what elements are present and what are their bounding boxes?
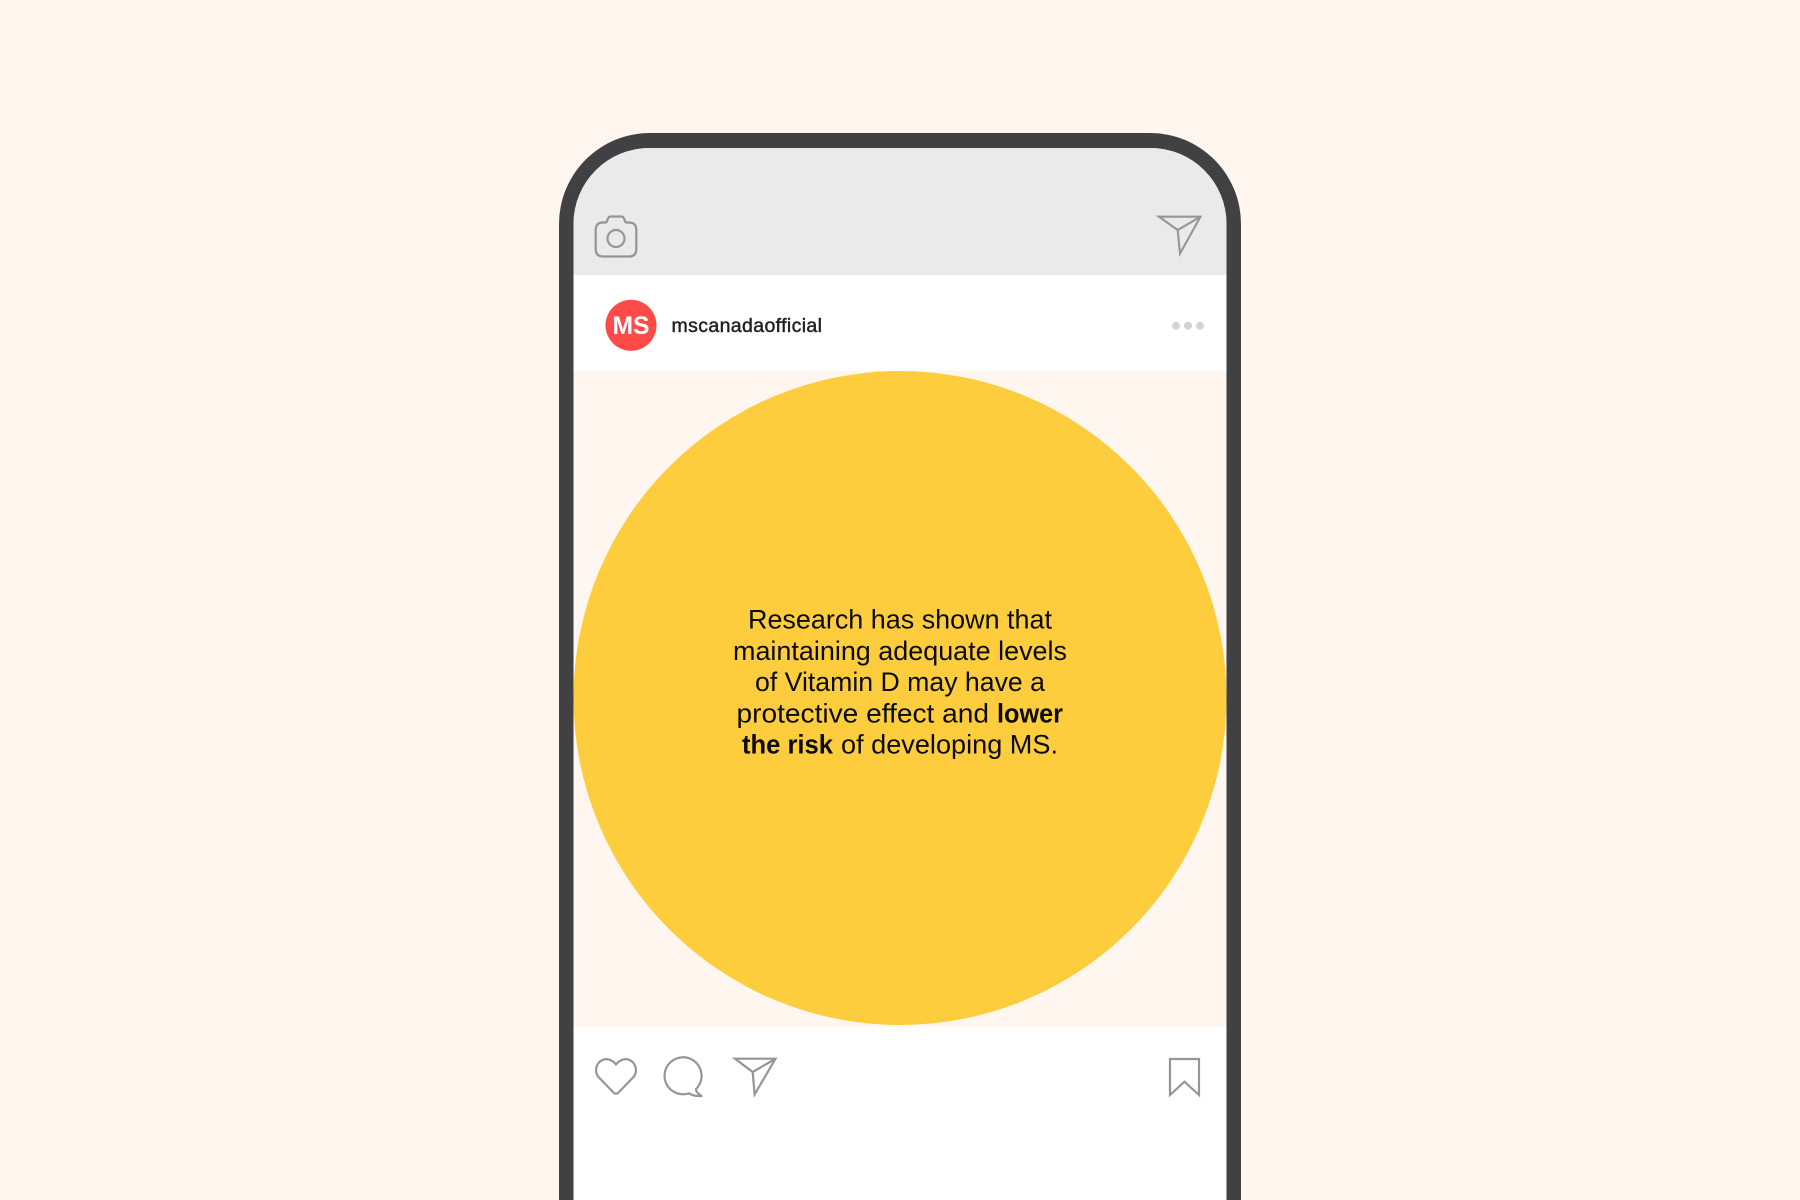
phone screen — [574, 148, 1226, 1200]
message text: the risk — [742, 730, 834, 760]
post header — [606, 300, 1204, 351]
icon: share — [735, 1059, 776, 1094]
icon: more dots — [1172, 322, 1204, 330]
yellow circle — [574, 371, 1226, 1025]
message text: lower — [997, 698, 1063, 728]
phone body frame — [559, 133, 1241, 1200]
icon: heart — [596, 1059, 636, 1094]
message text: protective effect and — [736, 698, 989, 728]
top app bar — [574, 148, 1226, 275]
message text: of Vitamin D may have a — [755, 667, 1046, 697]
message text: Research has shown that — [748, 604, 1052, 634]
icon: send — [1159, 217, 1200, 254]
account name: mscanadaofficial — [672, 315, 822, 337]
icon: comment bubble — [665, 1057, 702, 1096]
avatar: MS logo — [606, 300, 656, 351]
icon: camera — [596, 216, 636, 256]
message text: maintaining adequate levels — [733, 636, 1067, 666]
post action bar — [596, 1057, 1199, 1096]
message text — [733, 604, 1067, 760]
post image panel — [574, 371, 1226, 1027]
icon: bookmark — [1170, 1059, 1199, 1095]
message text: of developing MS. — [841, 730, 1058, 760]
avatar: MS logo: MS — [612, 312, 650, 340]
phone mockup — [559, 133, 1241, 1200]
